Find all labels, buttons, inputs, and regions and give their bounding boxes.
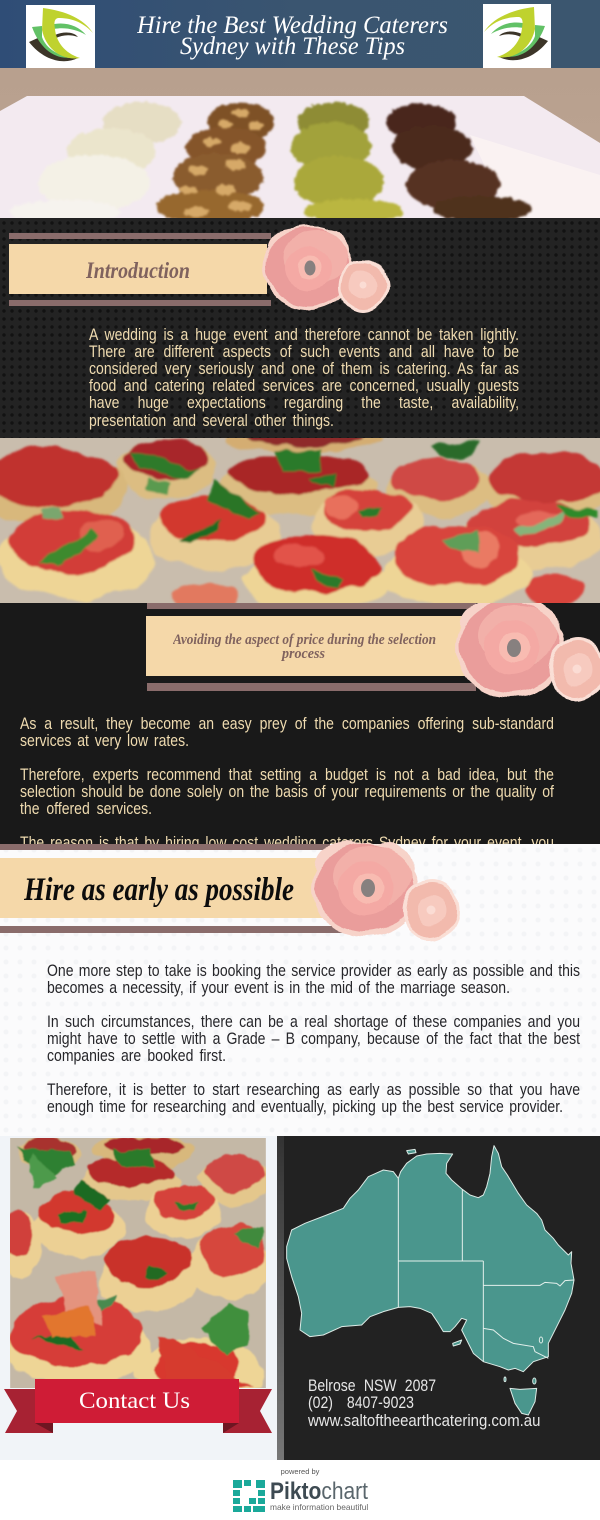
icon: rose flowers — [311, 840, 460, 942]
text block: booking advice: companies are booked first. — [47, 1047, 226, 1065]
text block: booking advice: One more step to take is booking the service provider as early as possible and this — [47, 962, 580, 980]
logo right — [483, 4, 551, 68]
text block: intro: A wedding is a huge event and therefore cannot be taken lightly. — [89, 326, 519, 344]
panel: contact map — [277, 1136, 600, 1460]
text block: booking advice: might have to settle with a Grade – B company, because of the fact that the best — [47, 1030, 580, 1048]
text block: price advice — [20, 715, 554, 844]
heading text: process — [280, 646, 325, 662]
hero photo: dessert plate — [0, 0, 600, 219]
text block: price advice: As a result, they become an easy prey of the companies offering sub-standard — [20, 715, 554, 733]
ribbon: contact us — [4, 1379, 272, 1433]
panel: avoiding price — [0, 603, 600, 844]
logo left — [26, 5, 95, 68]
text block: intro: considered very seriously and one of them is catering. As far as — [89, 360, 519, 378]
title — [137, 12, 448, 60]
heading text — [173, 632, 436, 662]
text block: booking advice: In such circumstances, there can be a real shortage of these companies and you — [47, 1013, 580, 1031]
text block: price advice: Therefore, experts recommend that setting a budget is not a bad idea, but the — [20, 766, 554, 784]
footer: piktochart branding — [0, 1460, 600, 1520]
text block: price advice: services at very low rates. — [20, 732, 189, 750]
heading banner: introduction — [9, 233, 271, 306]
title: Hire the Best Wedding Caterers — [137, 12, 448, 39]
text block: price advice: selection should be done solely on the basis of your requirements or the quality of — [20, 783, 554, 801]
text block: booking advice: enough time for researching and eventually, picking up the best service provider. — [47, 1098, 563, 1116]
button text: Contact Us — [79, 1388, 190, 1413]
ribbon tails — [4, 1379, 272, 1433]
contact details — [308, 1377, 540, 1430]
powered by: powered by — [281, 1467, 319, 1476]
map: australia — [286, 1145, 574, 1416]
contact details: Belrose NSW 2087 — [308, 1377, 436, 1395]
text block: booking advice: becomes a necessity, if your event is in the mid of the marriage season. — [47, 979, 510, 997]
text block: booking advice: Therefore, it is better to start researching as early as possible so that you have — [47, 1081, 580, 1099]
photo: tomato tarts wide — [0, 438, 600, 603]
panel: contact left — [0, 1136, 277, 1460]
icon: rose flowers — [262, 224, 390, 313]
icon: piktochart logo — [233, 1480, 265, 1512]
heading banner: hire early — [0, 844, 342, 933]
text block: intro: presentation and several other things. — [89, 412, 334, 430]
text block: intro — [89, 326, 519, 430]
text block: booking advice — [47, 962, 580, 1116]
panel: introduction — [0, 219, 600, 438]
heading banner: price — [146, 603, 476, 691]
contact details: (02) 8407-9023 — [308, 1394, 414, 1412]
title: Sydney with These Tips — [180, 33, 405, 60]
tagline: make information beautiful — [270, 1502, 368, 1512]
text block: price advice: the offered services. — [20, 800, 152, 818]
panel: hire early — [0, 844, 600, 1136]
text block: intro: food and catering related services are concerned, usually guests — [89, 377, 519, 395]
text block: intro: have huge expectations regarding the taste, availability, — [89, 394, 519, 412]
icon: rose flowers — [455, 603, 600, 702]
photo: tomato tarts square — [10, 1138, 266, 1388]
contact details: www.saltoftheearthcatering.com.au — [308, 1412, 540, 1430]
text block: intro: There are different aspects of such events and all have to be — [89, 343, 519, 361]
